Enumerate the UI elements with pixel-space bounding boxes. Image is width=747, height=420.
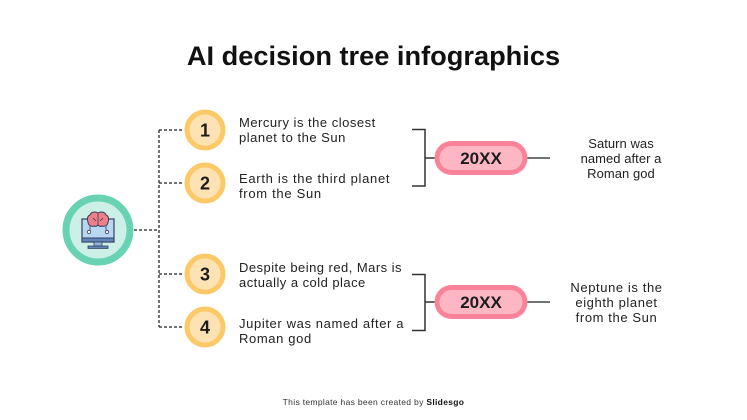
number badge 2 (187, 165, 223, 201)
number badge 4: 4 (200, 318, 210, 338)
text: Earth: Earth is the third planet (239, 171, 390, 186)
pill: bottom 20XX (437, 288, 525, 316)
top bracket and connectors (412, 130, 550, 186)
text: Mars (239, 260, 402, 290)
text: Mars: Despite being red, Mars is (239, 260, 402, 275)
number badge 2: 2 (200, 174, 210, 194)
text: Mercury: Mercury is the closest (239, 115, 376, 130)
bottom bracket and connectors (412, 274, 550, 330)
text: Earth (239, 171, 390, 201)
pill: top 20XX (437, 144, 525, 172)
text: Mercury (239, 115, 376, 145)
text: Saturn (581, 136, 662, 180)
number badge 1: 1 (200, 120, 210, 140)
pill: bottom 20XX: 20XX (460, 293, 502, 312)
text: Saturn: named after a (581, 150, 661, 166)
text: Earth: from the Sun (239, 186, 322, 201)
text: Neptune (570, 280, 663, 324)
text: Mercury: planet to the Sun (239, 130, 346, 145)
title: AI decision tree infographics (187, 40, 560, 71)
number badge 1 (187, 112, 223, 148)
pill: top 20XX: 20XX (460, 149, 502, 168)
dashed connectors (134, 130, 184, 327)
text: Jupiter: Roman god (239, 331, 312, 346)
footer credit: This template has been created by Slidesgo (283, 397, 464, 407)
text: Mars: actually a cold place (239, 275, 366, 290)
icon: AI monitor with brain (66, 198, 130, 262)
number badge 3 (187, 256, 223, 292)
text: Saturn: Roman god (587, 166, 655, 180)
number badge 3: 3 (200, 264, 210, 284)
text: Neptune: from the Sun (576, 310, 657, 324)
number badge 4 (187, 309, 223, 345)
text: Jupiter: Jupiter was named after a (239, 316, 404, 331)
text: Neptune: eighth planet (575, 294, 658, 310)
text: Neptune: Neptune is the (570, 280, 663, 294)
text: Jupiter (239, 316, 404, 346)
text: Saturn: Saturn was (588, 136, 654, 150)
